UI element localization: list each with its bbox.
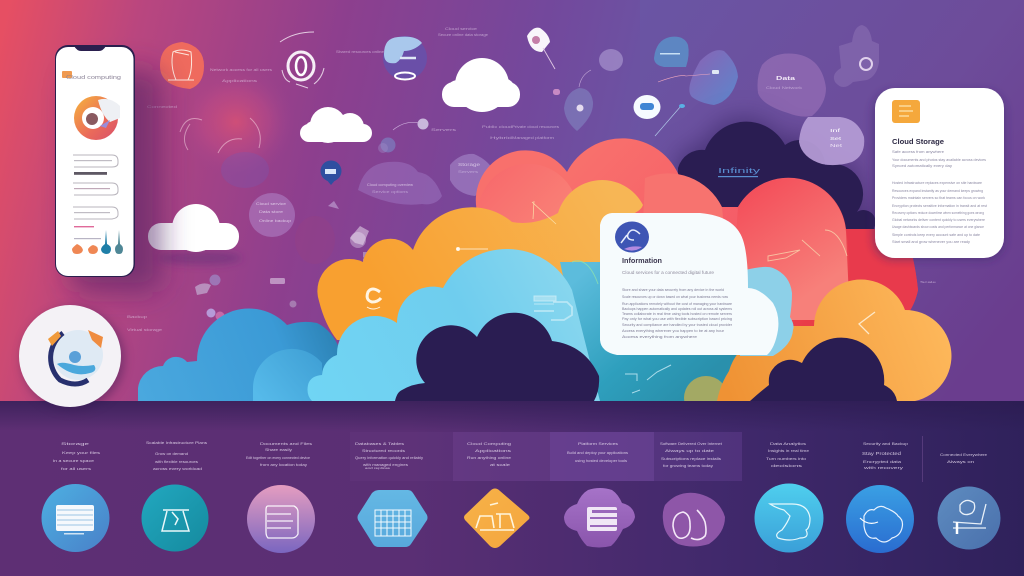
white badge xyxy=(634,95,685,136)
caption 1 xyxy=(53,442,100,471)
icon: cyan sketch xyxy=(754,484,824,552)
glow bubble xyxy=(176,66,335,264)
icon: orange square xyxy=(892,100,920,123)
caption 7 xyxy=(660,442,722,468)
caption 4: Structured records xyxy=(362,449,405,453)
floating captions: Connected xyxy=(147,105,177,109)
caption 10 xyxy=(940,453,987,464)
caption 7: Software Delivered Over Internet xyxy=(660,442,722,446)
caption 9: Security and Backup xyxy=(863,442,908,446)
caption 8: Turn numbers into xyxy=(766,457,806,461)
floating captions: Network access for all users xyxy=(210,68,273,72)
caption 8 xyxy=(766,442,809,468)
phone notch xyxy=(74,46,106,51)
icon: purple ring xyxy=(663,493,725,546)
bubble: lilac: Net xyxy=(830,143,843,148)
card icon xyxy=(615,222,649,252)
caption 4 xyxy=(355,442,423,470)
dark red block xyxy=(846,229,918,318)
caption 2: with flexible resources xyxy=(155,460,198,464)
floating captions: Servers xyxy=(431,128,457,132)
bubble: lilac: Set xyxy=(830,136,842,141)
phone form rows xyxy=(73,155,118,239)
caption 1: Storage xyxy=(61,442,89,446)
card heading: Cloud Storage xyxy=(892,139,944,146)
cloud: navy foreground centre xyxy=(395,313,599,401)
card body text: Synced automatically every day xyxy=(892,163,952,168)
card body text: Usage dashboards show costs and performance at one glance xyxy=(892,224,985,229)
card body text: Run applications remotely without the cost of managing your hardware xyxy=(622,301,733,306)
card bump xyxy=(740,267,794,356)
card body text: Security and compliance are handled by your trusted cloud provider xyxy=(622,322,733,327)
card body text: Global networks deliver content quickly to users everywhere xyxy=(892,217,986,222)
floating captions: Scale xyxy=(920,280,937,284)
bubble: lilac xyxy=(799,117,864,165)
caption 9: with recovery xyxy=(864,466,903,470)
large purple bubble: Cloud Network xyxy=(766,85,802,90)
bubble: right caption: Storage xyxy=(458,162,481,167)
caption 8: Data Analytics xyxy=(770,442,806,446)
blue bubble xyxy=(654,37,738,105)
icon row xyxy=(42,484,1000,553)
caption 3 xyxy=(246,442,312,467)
cloud: teal centre xyxy=(560,262,745,401)
icon: blue sketch xyxy=(846,485,914,553)
caption 6 xyxy=(567,442,628,463)
sky blue marks xyxy=(534,302,572,320)
faint camera bubble xyxy=(834,25,879,87)
caption 4: with managed engines xyxy=(363,463,408,467)
card body text: Simple controls keep every account safe and up to date xyxy=(892,232,981,237)
caption 5: Applications xyxy=(475,449,511,453)
phone title xyxy=(62,71,121,81)
icon: pink stack xyxy=(247,485,315,553)
phone xyxy=(55,45,162,292)
bottom band xyxy=(0,401,1024,576)
cloud: mid blue xyxy=(138,308,340,401)
card body text: Pay only for what you use with flexible subscription based pricing xyxy=(622,316,732,321)
cloud: orange left xyxy=(317,180,643,340)
bubble: left caption: Data store xyxy=(259,209,284,214)
caption 5: Run anything online xyxy=(467,456,511,460)
caption 1: for all users xyxy=(61,467,91,471)
caption 6: using hosted developer tools xyxy=(575,459,627,463)
top bubbles right xyxy=(527,25,879,136)
caption 8: Insights in real time xyxy=(768,449,809,453)
phone title: Cloud computing xyxy=(66,75,121,81)
caption 4: and replicas xyxy=(365,466,391,470)
decorative items near orange cloud xyxy=(195,118,428,320)
accent in orange cloud xyxy=(859,312,875,334)
card: top right white xyxy=(872,88,1006,261)
icon: teal tent xyxy=(142,484,208,552)
bubble: centre caption: Cloud computing overview xyxy=(367,182,413,187)
card body text: Access everything from anywhere xyxy=(622,334,698,339)
caption 5: at scale xyxy=(490,463,510,467)
card body text: Access everything wherever you happen to be at any hour xyxy=(622,328,725,333)
card body text: Safe access from anywhere xyxy=(892,149,945,154)
caption 7: Subscriptions replace installs xyxy=(661,457,721,461)
bubble: right caption: Servers xyxy=(458,169,478,174)
caption 2: Scalable Infrastructure Plans xyxy=(146,441,207,445)
card body text: Recovery options reduce downtime when something goes wrong xyxy=(892,210,984,215)
red lobe left xyxy=(478,164,572,300)
bubble: centre caption: Service options xyxy=(372,190,408,194)
caption 4: Databases & Tables xyxy=(355,442,404,446)
icon: sphere xyxy=(383,36,427,80)
floating captions: Virtual storage xyxy=(127,328,162,332)
card: centre white xyxy=(600,213,794,356)
floating captions: Secure online data storage xyxy=(438,33,488,37)
icon: purple blob xyxy=(564,488,635,548)
cloud: navy caption xyxy=(718,168,761,177)
caption 2 xyxy=(146,441,207,471)
card heading: Information xyxy=(622,258,662,265)
red lobe right xyxy=(730,178,850,320)
cloud: navy back xyxy=(678,122,876,250)
cloud: red group xyxy=(476,138,918,400)
caption 4: Query information quickly and reliably xyxy=(355,456,423,460)
highlighted caption panels xyxy=(350,432,453,481)
purple drop xyxy=(553,49,623,131)
caption 6: Platform Services xyxy=(578,442,618,446)
caption 9 xyxy=(862,442,908,470)
bubble: left caption: Cloud service xyxy=(256,201,287,206)
floating captions: Hybrid xyxy=(490,136,513,140)
floating captions: Managed platform xyxy=(512,136,555,140)
caption 3: Edit together on every connected device xyxy=(246,456,310,460)
floating captions: Applications xyxy=(222,79,258,83)
caption 9: Encrypted data xyxy=(863,460,901,464)
floating captions: Shared resources online xyxy=(336,50,384,54)
red lobe centre xyxy=(640,173,730,290)
icon: orange cloud mark xyxy=(367,201,556,309)
bubble: centre caption xyxy=(358,162,442,205)
caption 5: Cloud Computing xyxy=(467,442,511,446)
icon: hexagon grid xyxy=(358,490,428,547)
caption 5 xyxy=(467,442,511,467)
icon: red mug badge xyxy=(160,42,204,89)
caption 9: Stay Protected xyxy=(862,451,902,456)
cloud: white lower left xyxy=(148,204,242,265)
icon: files xyxy=(42,484,110,552)
floating captions xyxy=(127,27,937,332)
bubble: left caption: Online backup xyxy=(259,218,292,223)
large purple bubble xyxy=(758,53,826,117)
card body text: Providers maintain servers so that teams can focus on work xyxy=(892,195,985,200)
cloud: navy inside orange xyxy=(750,338,897,401)
cloud: sky blue xyxy=(308,249,600,401)
bubble: left caption xyxy=(249,193,295,237)
card body text: Store and share your data securely from any device in the world xyxy=(622,287,724,292)
cloud: white top centre xyxy=(442,58,520,112)
caption 2: across every workload xyxy=(153,467,202,471)
icon: steel sketch xyxy=(938,486,1000,550)
caption 2: Grow on demand xyxy=(155,452,188,456)
floating captions: Public cloud xyxy=(482,125,512,129)
captions row xyxy=(53,441,987,471)
card body text: Encryption protects sensitive information in transit and at rest xyxy=(892,203,988,208)
marks on teal xyxy=(534,261,671,393)
card body text: Backups happen automatically and updates roll out across all systems xyxy=(622,306,732,311)
card subheading: Cloud services for a connected digital future xyxy=(622,270,715,275)
phone body xyxy=(55,45,135,277)
caption 10: Connected Everywhere xyxy=(940,453,987,457)
card body text xyxy=(892,149,988,244)
background gradient xyxy=(0,0,1024,402)
cloud: orange right xyxy=(717,280,951,401)
pin icon xyxy=(320,160,342,185)
card body text: Hosted infrastructure replaces expensive on site hardware xyxy=(892,180,983,185)
large purple bubble: Data xyxy=(776,76,795,82)
caption 1: Keep your files xyxy=(62,451,100,455)
logo circle xyxy=(19,305,121,407)
bubble: right caption xyxy=(450,154,493,196)
white tag xyxy=(527,28,555,69)
caption 10: Always on xyxy=(947,460,974,464)
phone logo xyxy=(74,96,120,140)
card body text xyxy=(622,287,733,339)
cloud: white middle xyxy=(300,107,372,143)
card body text: Start small and grow whenever you are ready xyxy=(892,239,970,244)
lens bubble xyxy=(684,376,728,420)
caption 3: Share easily xyxy=(265,448,292,452)
floating captions: Private cloud resources xyxy=(512,125,560,129)
red lobe strokes xyxy=(768,230,847,261)
icon: swirl ring xyxy=(280,32,324,88)
decorative floating bubbles and captions xyxy=(127,25,937,332)
caption 7: Always up to date xyxy=(665,449,714,453)
caption 8: decisions xyxy=(771,464,802,468)
phone drops xyxy=(72,230,123,254)
caption 1: in a secure space xyxy=(53,459,94,463)
floating captions: Backup xyxy=(127,315,147,319)
cloud: navy caption: Infinity xyxy=(718,168,761,175)
card body text: Teams collaborate in real time using tools hosted on remote servers xyxy=(622,311,732,316)
floating captions: Cloud service xyxy=(445,27,477,31)
caption 3: from any location today xyxy=(260,463,307,467)
bubble: lilac: Inf xyxy=(830,128,841,133)
card body text: Scale resources up or down based on what your business needs now xyxy=(622,294,728,299)
card body text: Resources expand instantly as your demand keeps growing xyxy=(892,188,983,193)
caption 7: for growing teams today xyxy=(663,464,713,468)
card body text: Your documents and photos stay available across devices xyxy=(892,157,986,162)
icon: orange diamond xyxy=(464,488,530,548)
caption 3: Documents and Files xyxy=(260,442,312,446)
caption 6: Build and deploy your applications xyxy=(567,451,628,455)
